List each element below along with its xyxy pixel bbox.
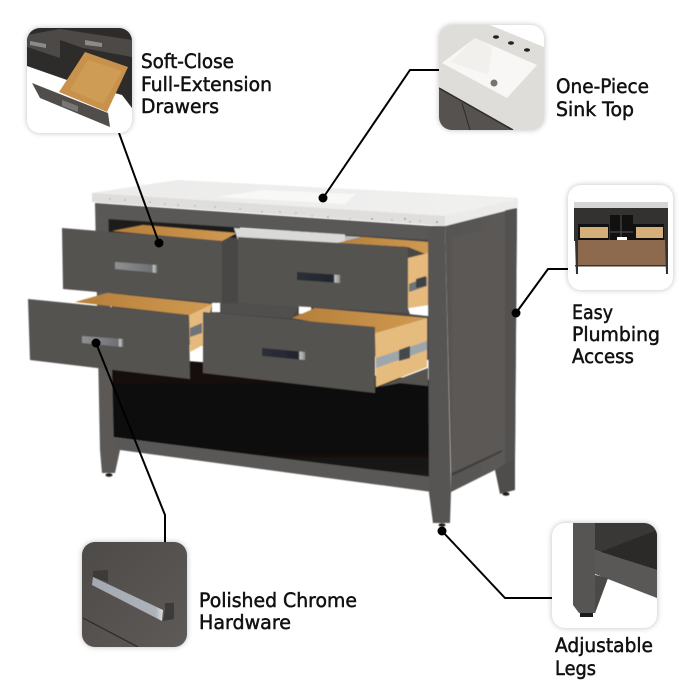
thumbnail: drawer detail	[27, 28, 132, 133]
label: easy plumbing access	[572, 301, 660, 368]
vanity cabinet	[28, 180, 518, 527]
marker dot: drawers	[154, 238, 164, 248]
label: easy plumbing access: Plumbing	[572, 323, 660, 346]
marker dot: legs	[438, 526, 446, 536]
marker dot: hardware	[92, 338, 100, 348]
label: adjustable legs: Adjustable	[555, 634, 653, 657]
marker dot: plumbing access	[512, 308, 520, 318]
label: one-piece sink top: Sink Top	[556, 98, 634, 121]
marker dot: sink top	[318, 194, 328, 202]
label: polished chrome hardware: Hardware	[199, 611, 291, 634]
countertop	[92, 180, 518, 226]
white gaps between drawers	[212, 303, 428, 316]
top rail	[95, 203, 430, 240]
label: soft-close drawers	[141, 50, 272, 118]
label: one-piece sink top: One-Piece	[556, 75, 649, 98]
leader line: plumbing access	[516, 269, 569, 313]
label: one-piece sink top	[556, 75, 649, 121]
label: soft-close drawers: Full-Extension	[141, 73, 272, 96]
rail behind lower right drawer	[378, 368, 428, 387]
back right leg	[495, 458, 515, 494]
label: soft-close drawers: Soft-Close	[141, 50, 234, 73]
top right drawer	[238, 237, 428, 313]
thumbnail: chrome handle	[82, 542, 187, 647]
top left drawer	[62, 225, 237, 303]
label: polished chrome hardware: Polished Chrome	[199, 589, 357, 612]
thumbnail: plumbing access	[568, 185, 673, 290]
bottom rail	[112, 437, 432, 492]
front right post and leg	[428, 226, 451, 523]
open lower shelf interior	[110, 355, 432, 479]
side panel	[445, 208, 517, 492]
label: adjustable legs	[555, 634, 653, 680]
bottom right drawer	[203, 308, 427, 393]
leader line: legs	[442, 531, 553, 598]
leader line: sink top	[323, 70, 440, 198]
leader line: hardware	[96, 343, 165, 545]
upper cabinet opening	[108, 225, 430, 360]
label: polished chrome hardware	[199, 589, 357, 634]
label: soft-close drawers: Drawers	[141, 95, 219, 118]
label: easy plumbing access: Access	[572, 345, 634, 368]
left front leg	[95, 203, 120, 473]
thumbnail: sink top	[439, 25, 544, 130]
leader line: drawers	[119, 133, 159, 243]
bottom left drawer	[28, 293, 212, 379]
label: easy plumbing access: Easy	[572, 301, 613, 324]
thumbnail: adjustable leg	[552, 523, 657, 628]
label: adjustable legs: Legs	[555, 657, 596, 680]
